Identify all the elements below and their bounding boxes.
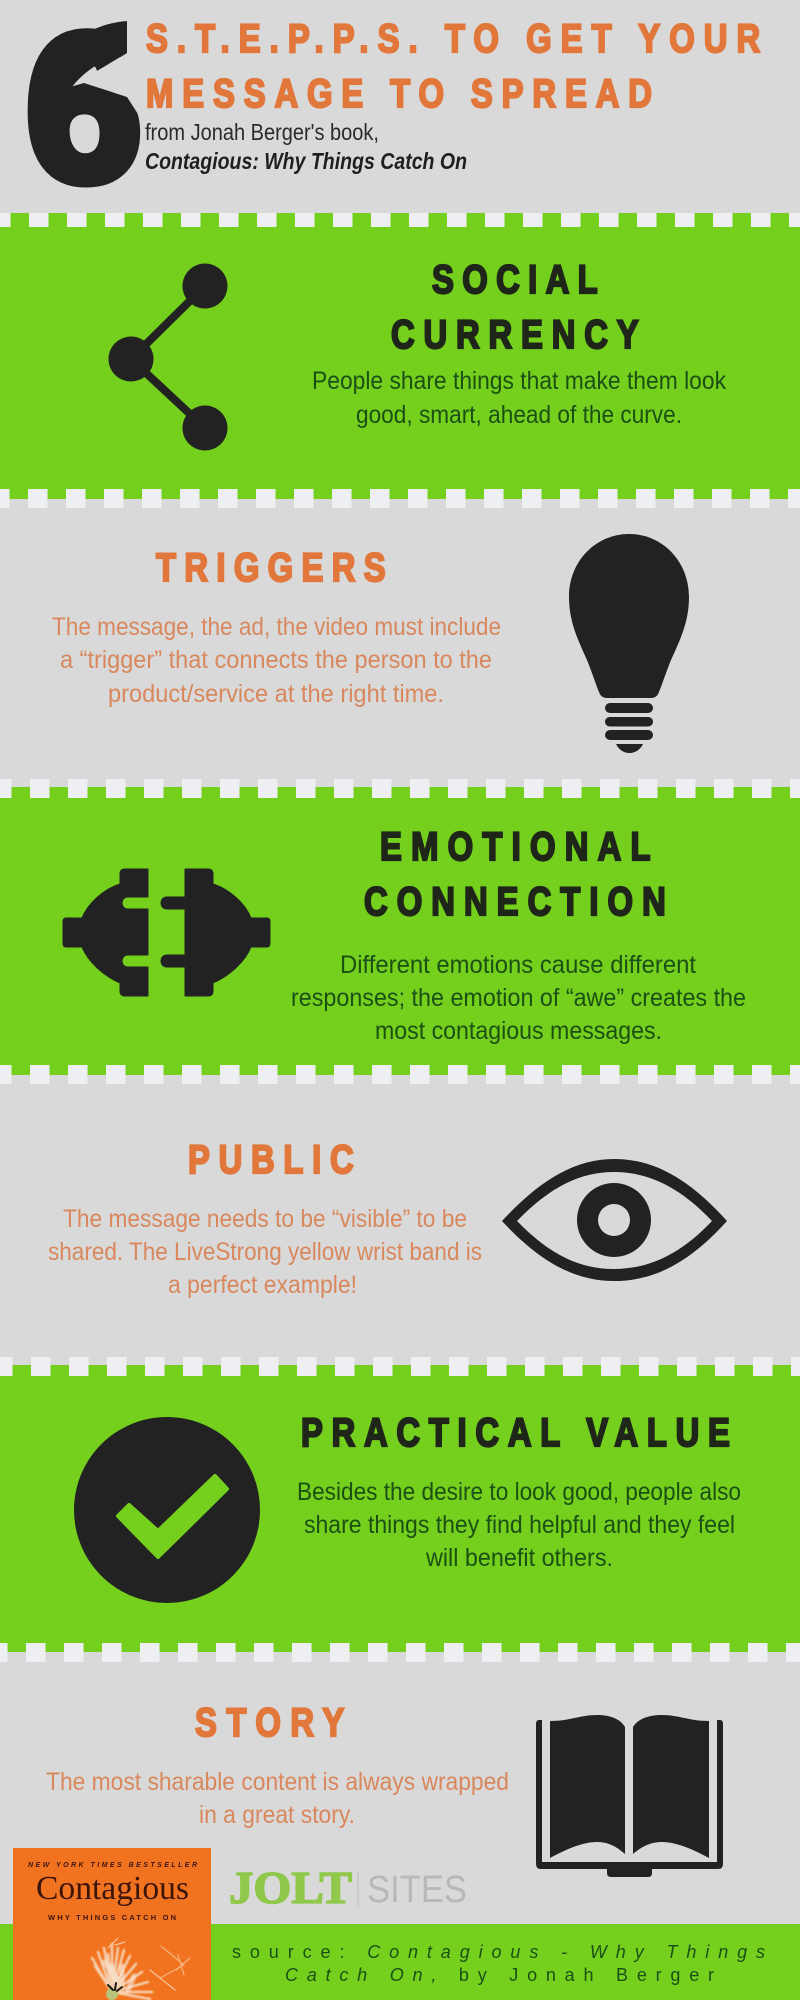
description: will benefit others.: [425, 1544, 613, 1572]
description: [291, 951, 746, 1045]
panel: emotional connection: [0, 787, 800, 1075]
book cover text: WHY THINGS CATCH ON: [48, 1913, 176, 1922]
source note: source: Contagious - Why Things: [232, 1942, 765, 1962]
description: a perfect example!: [168, 1271, 357, 1299]
description: shared. The LiveStrong yellow wrist band is: [48, 1238, 482, 1266]
icon: light bulb: [569, 534, 689, 753]
heading: CONNECTION: [364, 879, 666, 924]
heading: SOCIAL: [432, 257, 598, 302]
source note: Catch On, by Jonah Berger: [285, 1965, 714, 1985]
heading: TRIGGERS: [156, 545, 386, 590]
panel: story: [46, 1700, 723, 1877]
description: The message, the ad, the video must include: [52, 613, 501, 641]
panel: triggers: [52, 534, 689, 753]
heading: [364, 824, 666, 924]
panel: practical value: [0, 1365, 800, 1652]
logo: jolt sites: JOLT: [229, 1862, 352, 1913]
panel: social currency: [0, 213, 800, 499]
heading: CURRENCY: [391, 312, 639, 357]
description: [297, 1478, 741, 1572]
description: most contagious messages.: [375, 1017, 662, 1045]
icon: share: [108, 264, 228, 450]
subtitle: from Jonah Berger's book,: [145, 119, 379, 145]
panel: public: [48, 1137, 727, 1299]
heading: STORY: [195, 1700, 344, 1745]
description: responses; the emotion of “awe” creates the: [291, 984, 746, 1012]
heading: PUBLIC: [188, 1137, 354, 1182]
icon: plug and socket: [63, 869, 270, 996]
title: [146, 16, 760, 116]
icon: open book: [536, 1715, 723, 1877]
subtitle: Contagious: Why Things Catch On: [145, 148, 467, 174]
logo: jolt sites: [229, 1862, 467, 1913]
description: [52, 613, 501, 708]
dandelion illustration: [92, 1938, 190, 2000]
heading: PRACTICAL VALUE: [301, 1410, 730, 1455]
description: [48, 1205, 482, 1299]
book cover text: NEW YORK TIMES BESTSELLER: [28, 1862, 197, 1869]
description: [312, 367, 726, 429]
book cover: [13, 1848, 211, 2000]
subtitle: [145, 119, 467, 174]
description: Besides the desire to look good, people also: [297, 1478, 741, 1506]
description: Different emotions cause different: [340, 951, 696, 979]
description: share things they find helpful and they feel: [304, 1511, 735, 1539]
book cover text: [28, 1862, 197, 1922]
description: The message needs to be “visible” to be: [63, 1205, 467, 1233]
description: The most sharable content is always wrapped: [46, 1768, 509, 1796]
description: product/service at the right time.: [108, 680, 444, 708]
title: MESSAGE TO SPREAD: [146, 71, 652, 116]
description: [46, 1768, 509, 1829]
logo: jolt sites: SITES: [367, 1869, 467, 1911]
heading: [391, 257, 639, 357]
description: in a great story.: [199, 1801, 355, 1829]
header: [26, 0, 760, 224]
description: a “trigger” that connects the person to the: [60, 646, 492, 674]
title: S.T.E.P.P.S. TO GET YOUR: [146, 16, 760, 61]
source note: [232, 1942, 765, 1985]
book cover text: Contagious: [36, 1870, 189, 1907]
heading: EMOTIONAL: [380, 824, 651, 869]
description: People share things that make them look: [312, 367, 726, 395]
icon: eye: [502, 1159, 727, 1281]
description: good, smart, ahead of the curve.: [356, 401, 682, 429]
icon: check mark: [74, 1417, 260, 1603]
footer band: [0, 1924, 800, 2000]
